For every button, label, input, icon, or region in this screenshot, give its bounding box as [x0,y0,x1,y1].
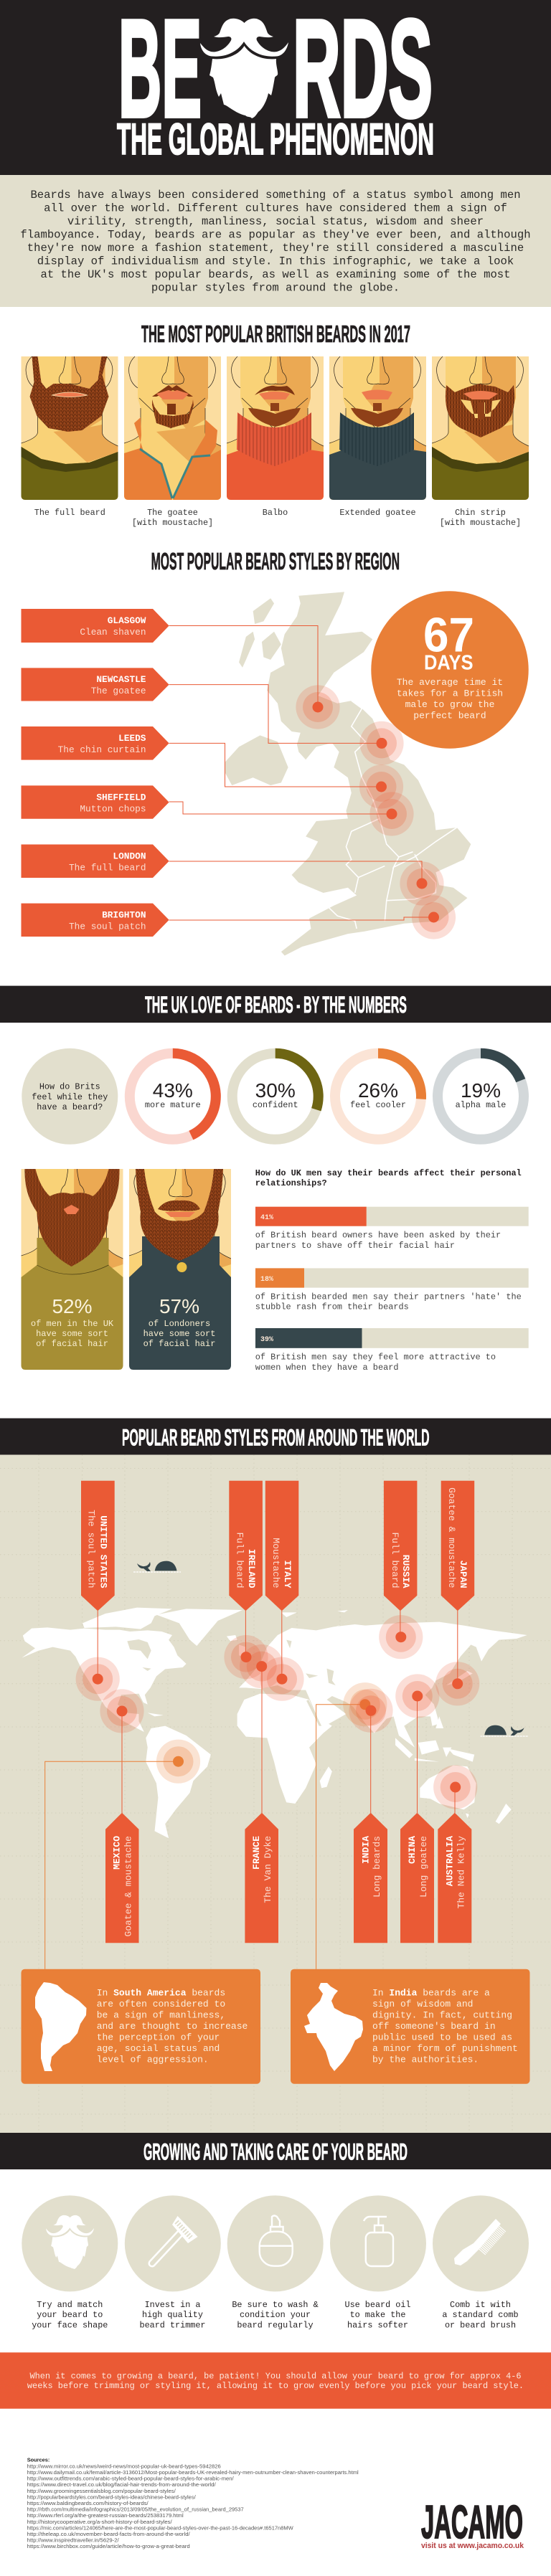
intro panel: all over the world. Different cultures have considered them a sign of [44,202,507,215]
flag: Japan: JAPAN [458,1560,468,1588]
icon: whale top [133,1561,181,1572]
region label: Leeds: LEEDS [118,733,146,744]
icon: whale right [481,1725,528,1736]
panel: South America: In South America beards [97,1987,225,1998]
callout: 67 days: 67 [423,608,474,663]
tip: trimmer: high quality [142,2310,203,2320]
callout: 67 days: perfect beard [413,710,486,721]
tip: trimmer: beard trimmer [139,2320,206,2330]
donut: 19% alpha male [438,1053,524,1140]
tip: trimmer [125,2195,221,2330]
sources list [27,2457,359,2549]
flag: Australia: The Ned Kelly [456,1836,467,1908]
intro panel: at the UK's most popular beards, as well as examining some of the most [40,268,511,281]
section band: care [0,2133,551,2169]
stat card: 52% of UK men [22,1169,123,1370]
bar: 39% [255,1328,529,1373]
tip: beard oil: to make the [350,2310,405,2320]
tip: comb: or beard brush [445,2320,516,2330]
stat card: 52% of UK men: 52% [52,1295,93,1317]
donut: 43% more mature: 43% [153,1079,193,1102]
flag: India: INDIA [360,1836,371,1864]
sources list: http://www.rferl.org/a/the-greatest-russian-beards/25383179.html [27,2512,184,2519]
sources list: http://www.outfittrends.com/arabic-styled-beard-popular-beard-styles-for-arabic-men/ [27,2476,235,2482]
portrait captions: Extended goatee [339,508,416,518]
flag: Japan [441,1481,474,1611]
flag: Mexico: Goatee & moustache [123,1836,133,1936]
tip: wash: beard regularly [237,2320,314,2330]
sources list: http://www.dailymail.co.uk/femail/article-3136012/Most-popular-beards-UK-revealed-hairy-men-outnumber-clean-shaven-counterparts.html [27,2469,359,2476]
banner: be patient: When it comes to growing a beard, be patient! You should allow your beard to grow for approx 4-6 [29,2371,522,2381]
region label: Brighton: The soul patch [69,921,146,932]
flag: Australia [438,1813,471,1943]
region label: Glasgow: GLASGOW [108,615,146,626]
portrait captions: [with moustache] [440,518,521,528]
donut: 19% alpha male: 19% [461,1079,501,1102]
bar: 41%: of British beard owners have been asked by their [255,1231,501,1241]
region label: Leeds: The chin curtain [58,744,146,755]
donut: 30% confident: confident [253,1100,298,1110]
question circle: have a beard? [37,1102,103,1112]
region label: Brighton: BRIGHTON [102,909,146,921]
tip: match beard to face: your beard to [37,2310,103,2320]
sources list: Sources: [27,2457,50,2463]
stat card: 57% of Londoners: have some sort [143,1329,215,1339]
sources list: http://rbth.com/multimedia/infographics/2013/09/05/the_evolution_of_russian_beard_29537 [27,2506,244,2513]
world map [22,1608,527,1838]
icon: razor [152,2216,198,2263]
flag: India: Long beards [372,1836,382,1898]
flag: Russia: RUSSIA [400,1555,411,1588]
portrait captions: [with moustache] [132,518,213,528]
portrait: the full beard [22,356,118,500]
intro panel: popular styles from around the globe. [151,281,400,294]
panel: India: public used to be used as [372,2032,512,2043]
panel: India: by the authorities. [372,2055,479,2065]
sources list: https://www.direct-travel.co.uk/blog/facial-hair-trends-from-around-the-world/ [27,2481,217,2488]
tip: wash [227,2195,324,2330]
stat card: 57% of Londoners: 57% [159,1295,199,1317]
flag: Italy: ITALY [282,1560,293,1588]
flag: Russia: Full beard [390,1532,400,1588]
tip: wash: Be sure to wash & [232,2300,319,2310]
title: BEARDS [118,0,433,146]
intro panel [0,175,551,307]
map markers: UK cities [296,685,456,939]
flag: Mexico: MEXICO [112,1836,123,1870]
section band: by the numbers [0,986,551,1023]
logo: Jacamo: visit us at www.jacamo.co.uk [421,2542,524,2550]
tip: match beard to face [22,2195,118,2330]
flag: Australia: AUSTRALIA [445,1836,455,1886]
sources list: http://historycooperative.org/a-short-history-of-beard-styles/ [27,2519,173,2525]
connector lines: UK regions [169,625,433,920]
callout: 67 days [371,591,529,749]
region label: Newcastle: The goatee [91,686,146,696]
UK map [225,592,471,955]
map markers: world [76,1615,479,1809]
donut: 26% feel cooler: feel cooler [350,1100,406,1110]
flag: Russia [384,1481,417,1611]
sources list: http://www.inspiredtraveller.in/5629-2/ [27,2537,120,2544]
tip: match beard to face: your face shape [32,2320,108,2330]
stat card: 52% of UK men: of men in the UK [31,1319,114,1329]
donut: 26% feel cooler [335,1053,421,1140]
stat card: 52% of UK men: of facial hair [36,1339,108,1349]
question circle: feel while they [32,1092,108,1102]
tip: comb [433,2195,529,2330]
intro panel: Beards have always been considered something of a status symbol among men [30,189,521,202]
portrait captions: The goatee [147,508,198,518]
region label: Glasgow [22,609,169,643]
icon: comb [454,2219,502,2265]
icon: beard [46,2215,94,2269]
stat card: 57% of Londoners [129,1169,231,1370]
sources list: http://www.mirror.co.uk/news/weird-news/most-popular-uk-beard-types-5942826 [27,2463,221,2470]
panel: South America: and are thought to increase [97,2021,248,2032]
icon: South America map [35,1982,86,2071]
banner: be patient [0,2352,551,2409]
flag: Japan: Goatee & moustache [446,1487,457,1588]
callout: 67 days: takes for a British [397,688,503,699]
panel: India [291,1969,529,2084]
flag: India [354,1813,387,1943]
panel: South America [22,1969,260,2084]
intro panel: flamboyance. Today, beards are as popular as they've ever been, and although [20,228,531,241]
bar: 18%: stubble rash from their beards [255,1302,409,1312]
donut: 26% feel cooler: 26% [358,1079,398,1102]
question circle [22,1048,118,1145]
flag: United States [81,1481,115,1611]
flag: France: FRANCE [251,1836,262,1870]
relationships question: relationships? [255,1178,327,1188]
portrait: extended goatee [329,356,426,500]
callout: 67 days: male to grow the [405,699,494,710]
bar: 39%: of British men say they feel more attractive to [255,1353,496,1363]
stat card: 52% of UK men: have some sort [36,1329,108,1339]
donut: 30% confident [232,1053,319,1140]
panel: India: off someone's beard in [372,2021,496,2032]
flag: China: Long goatee [418,1836,429,1898]
world panel background [0,1454,551,2133]
region label: Newcastle [22,668,169,701]
section band: around the world [0,1419,551,1455]
region label: Glasgow: Clean shaven [80,627,146,638]
flag: Italy: Moustache [270,1538,281,1588]
panel: India: a minor form of punishment [372,2043,518,2054]
region label: Brighton [22,904,169,937]
bar: 39%: 39% [260,1336,273,1344]
bar: 41%: 41% [260,1214,273,1222]
portrait captions [34,508,521,528]
panel: South America: the perception of your [97,2032,220,2043]
tip: match beard to face: Try and match [37,2300,103,2310]
tip: beard oil [330,2195,426,2330]
donut: 43% more mature [130,1053,216,1140]
bar: 18%: of British bearded men say their partners 'hate' the [255,1292,522,1302]
intro panel: they're now more a fashion statement, they're still considered a masculine [27,242,524,255]
header band [0,0,551,175]
flag: China [400,1813,434,1943]
icon: pump bottle [364,2217,393,2266]
stat card: 57% of Londoners: of Londoners [149,1319,210,1329]
callout: 67 days: DAYS [424,652,474,675]
flag: Mexico [105,1813,139,1943]
tip: wash: condition your [240,2310,311,2320]
sources list: https://www.birchbox.com/guide/article/how-to-grow-a-great-beard [27,2543,190,2549]
region label: Sheffield: SHEFFIELD [96,792,146,802]
flag: Italy [265,1481,298,1611]
panel: India: dignity. In fact, cutting [372,2010,512,2021]
sources list: https://www.baldingbeards.com/history-of-beards/ [27,2500,149,2506]
panel: South America: level of aggression. [97,2055,209,2065]
flag: Ireland: Full beard [234,1532,245,1588]
flag: China: CHINA [407,1836,418,1864]
sources list: https://mic.com/articles/124065/here-are-the-most-popular-beard-styles-over-the-past-16-decades#.t6517n8MW [27,2524,293,2531]
portrait captions: Balbo [263,508,288,518]
panel: India: sign of wisdom and [372,1999,473,2009]
region label: Leeds [22,726,169,760]
flag: United States: UNITED STATES [98,1515,109,1588]
portrait: the goatee [124,356,221,500]
region label: London: LONDON [113,851,146,861]
region label: London: The full beard [69,862,146,873]
panel: South America: age, social status and [97,2043,220,2054]
panel: South America: are often considered to [97,1999,225,2009]
panel: India: In India beards are a [372,1987,490,1998]
tip: comb: Comb it with [450,2300,511,2310]
intro panel: display of individualism and style. In this infographic, we take a look [37,255,514,268]
region label: Sheffield [22,785,169,819]
portrait captions: Chin strip [455,508,506,518]
tip: comb: a standard comb [442,2310,519,2320]
bar: 18%: 18% [260,1276,273,1284]
flag: France: The Van Dyke [263,1836,273,1903]
connector lines: world orange [45,1705,365,1969]
stat card: 57% of Londoners: of facial hair [143,1339,215,1349]
sources list: http://theleap.co.uk/movember-beard-facts-from-around-the-world/ [27,2531,191,2537]
donut: 43% more mature: more mature [145,1100,201,1110]
icon: India map [304,1983,363,2071]
connector lines: world red [98,1611,458,1813]
portrait captions: The full beard [34,508,105,518]
portrait: chin strip [432,356,529,500]
bar: 39%: women when they have a beard [255,1363,398,1373]
question circle: How do Brits [39,1082,100,1092]
flag: United States: The soul patch [85,1510,96,1588]
bar: 18% [255,1268,529,1312]
region label: Newcastle: NEWCASTLE [96,674,146,685]
portrait: Balbo [227,356,324,500]
panel: South America: be a sign of manliness, [97,2010,225,2021]
tip: beard oil: Use beard oil [344,2300,411,2310]
sources list: http://www.groomingessentialsblog.com/popular-beard-styles/ [27,2488,176,2494]
flag: France [245,1813,278,1943]
relationships question: How do UK men say their beards affect their personal [255,1168,522,1178]
banner: be patient: weeks before trimming or styling it, allowing it to grow evenly before you pick your beard style. [27,2381,524,2391]
callout: 67 days: The average time it [397,677,503,688]
flag: Ireland [229,1481,263,1611]
bar: 41%: partners to shave off their facial hair [255,1241,455,1251]
tip: trimmer: Invest in a [145,2300,200,2310]
flag: Ireland: IRELAND [246,1549,257,1588]
sources list: http://popularbeardstyles.com/beard-styles-ideas/chinese-beard-styles/ [27,2494,197,2500]
donut: 30% confident: 30% [255,1079,296,1102]
tip: beard oil: hairs softer [347,2320,408,2330]
intro panel: virility, strength, manliness, social status, wisdom and sheer [67,215,484,228]
region label: Sheffield: Mutton chops [80,803,146,814]
relationships question [255,1168,522,1188]
donut: 19% alpha male: alpha male [456,1100,506,1110]
bar: 41% [255,1207,529,1251]
icon: wash bottle [260,2216,293,2266]
region label: London [22,845,169,878]
